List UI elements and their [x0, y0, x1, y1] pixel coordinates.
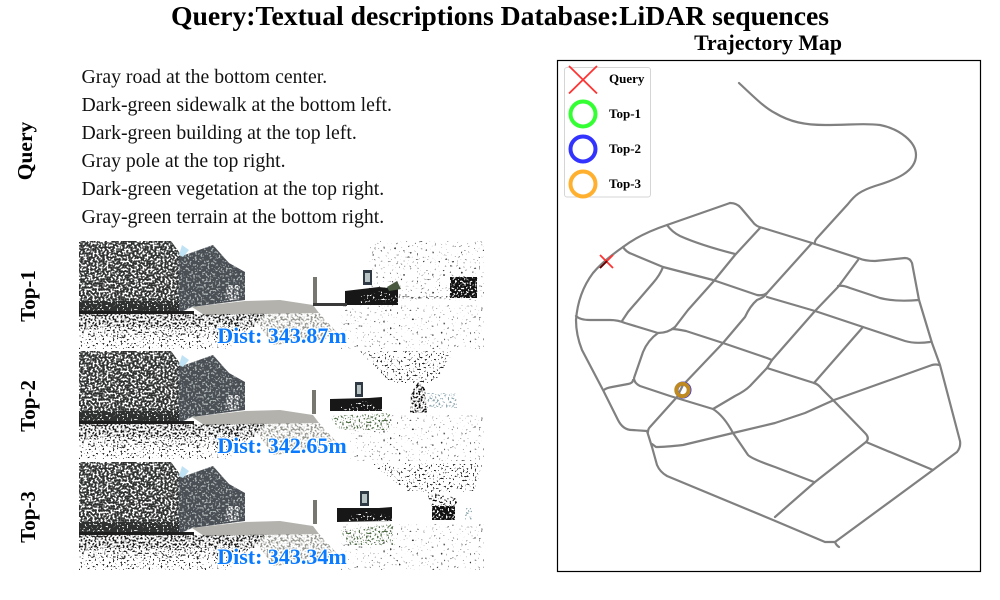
row label: Top-3: Top-3 — [16, 491, 40, 543]
panel: Top-1 point cloud — [79, 241, 484, 349]
distance label Top-3: Dist: 343.34m — [217, 544, 347, 569]
legend labels: Query — [609, 71, 645, 86]
legend labels: Top-1 — [609, 106, 641, 121]
row label: Top-2: Top-2 — [16, 380, 40, 432]
legend labels: Top-3 — [609, 176, 642, 191]
legend marker: Top-1 — [570, 102, 596, 126]
top matches ring — [676, 384, 690, 396]
title: Query:Textual descriptions Database:LiDAR sequences — [171, 0, 829, 31]
query text block: Dark-green sidewalk at the bottom left. — [82, 94, 392, 116]
legend labels: Top-2 — [609, 141, 641, 156]
query text block: Gray road at the bottom center. — [82, 66, 327, 88]
query text block: Dark-green vegetation at the top right. — [82, 178, 384, 200]
query text block: Dark-green building at the top left. — [82, 122, 357, 144]
map heading: Trajectory Map — [694, 31, 842, 55]
distance label Top-1: Dist: 343.87m — [217, 323, 347, 348]
distance label Top-2: Dist: 342.65m — [217, 433, 347, 458]
legend — [564, 66, 650, 197]
row label: Query: Query — [13, 121, 37, 180]
legend marker: Top-2 — [570, 136, 596, 162]
legend marker: Query — [569, 66, 597, 94]
query text block — [82, 66, 392, 228]
map frame — [558, 60, 980, 572]
panel: trajectory map — [558, 60, 980, 572]
query text block: Gray pole at the top right. — [82, 150, 286, 172]
row label: Top-1: Top-1 — [16, 270, 40, 322]
legend labels — [609, 71, 645, 191]
legend marker: Top-3 — [570, 172, 596, 196]
query text block: Gray-green terrain at the bottom right. — [82, 206, 384, 228]
query marker on map — [600, 255, 613, 268]
panel: Top-2 point cloud — [79, 351, 484, 461]
road network — [576, 83, 960, 547]
panel: Top-3 point cloud — [79, 462, 484, 570]
